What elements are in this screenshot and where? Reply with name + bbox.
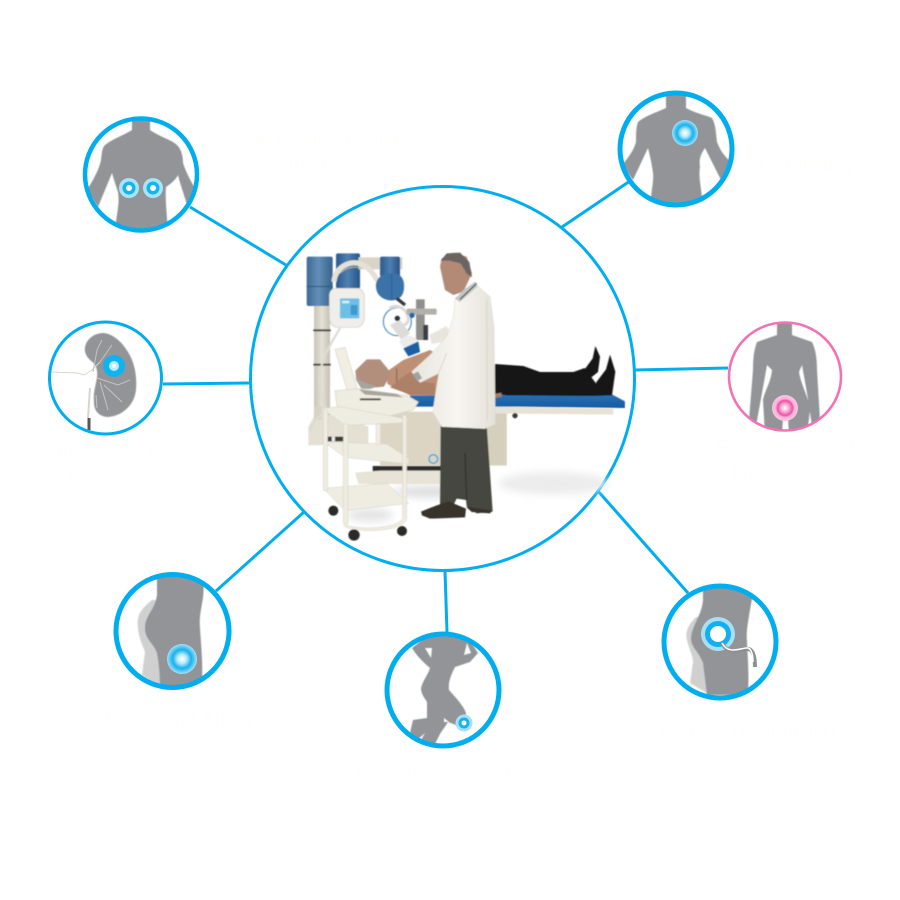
- device column: [308, 303, 368, 445]
- label: peripheral artery disease: Peripheral Artery: [106, 708, 254, 730]
- target: [103, 355, 125, 377]
- target: [456, 714, 472, 732]
- label: female arousal dysfunction: Female Arousal: [716, 437, 854, 459]
- silhouette: [624, 96, 728, 202]
- doctor: [399, 253, 495, 519]
- figure: [410, 636, 478, 748]
- label: stone fragmentation: lithotripsy: [280, 154, 364, 176]
- target: [672, 120, 698, 146]
- label: female arousal dysfunction: Dysfunction: [733, 462, 837, 484]
- ring: [85, 118, 197, 230]
- target: [772, 395, 798, 421]
- veins: [50, 340, 130, 418]
- blue cylinders and articulated arm: [307, 253, 404, 306]
- target: [167, 644, 197, 674]
- cart wheels: [328, 506, 407, 541]
- ureter: [88, 418, 90, 430]
- treatment table pedestal: [355, 407, 613, 484]
- target: [701, 617, 735, 651]
- body: [137, 577, 204, 685]
- icon: torso with two kidney targets: [85, 115, 197, 232]
- icon: side body with hip target: [116, 570, 229, 690]
- body: [749, 320, 820, 435]
- table mattress: [410, 393, 625, 408]
- ring: [50, 322, 162, 434]
- silhouette: [88, 120, 194, 228]
- label: chronic kidney disease: Chronic Kidney: [37, 438, 173, 460]
- cart: [322, 407, 409, 531]
- connector lines: [163, 181, 728, 632]
- ring: [729, 322, 841, 430]
- label: peripheral artery disease: Disease: [144, 733, 216, 755]
- icon: side body with catheter: [664, 580, 776, 698]
- central photo: doctor treating patient with therapy device: [307, 253, 625, 541]
- targets: [119, 178, 163, 198]
- icon: kidney: [50, 322, 162, 434]
- laptop: [335, 347, 418, 417]
- icon: torso with heart target: [620, 90, 732, 210]
- ring: [116, 574, 229, 688]
- monitor cable: [310, 328, 340, 432]
- label: orthopedics: Orthopedics Pain: [356, 762, 510, 784]
- label: chronic kidney disease: Disease: [69, 463, 141, 485]
- label: erectile dysfunction: Erectile Dysfunction: [659, 720, 835, 742]
- patient trousers and shoes: [495, 346, 615, 396]
- floor shadow: [347, 472, 608, 522]
- ring: [664, 586, 776, 698]
- therapy head: [383, 298, 437, 356]
- ring: [387, 634, 499, 746]
- catheter: [722, 643, 755, 667]
- body: [686, 580, 755, 695]
- monitor: [329, 288, 364, 327]
- patient torso and head: [355, 350, 502, 398]
- label: cardiology: Cardiology: [759, 154, 855, 176]
- kidney shape: [85, 333, 136, 417]
- icon: female body with pelvic target: [729, 320, 841, 435]
- icon: leg figure with knee target: [387, 634, 499, 748]
- central circle ring: [250, 186, 634, 570]
- ring: [620, 93, 732, 205]
- label: stone fragmentation: Stone Fragmentation: [219, 127, 405, 149]
